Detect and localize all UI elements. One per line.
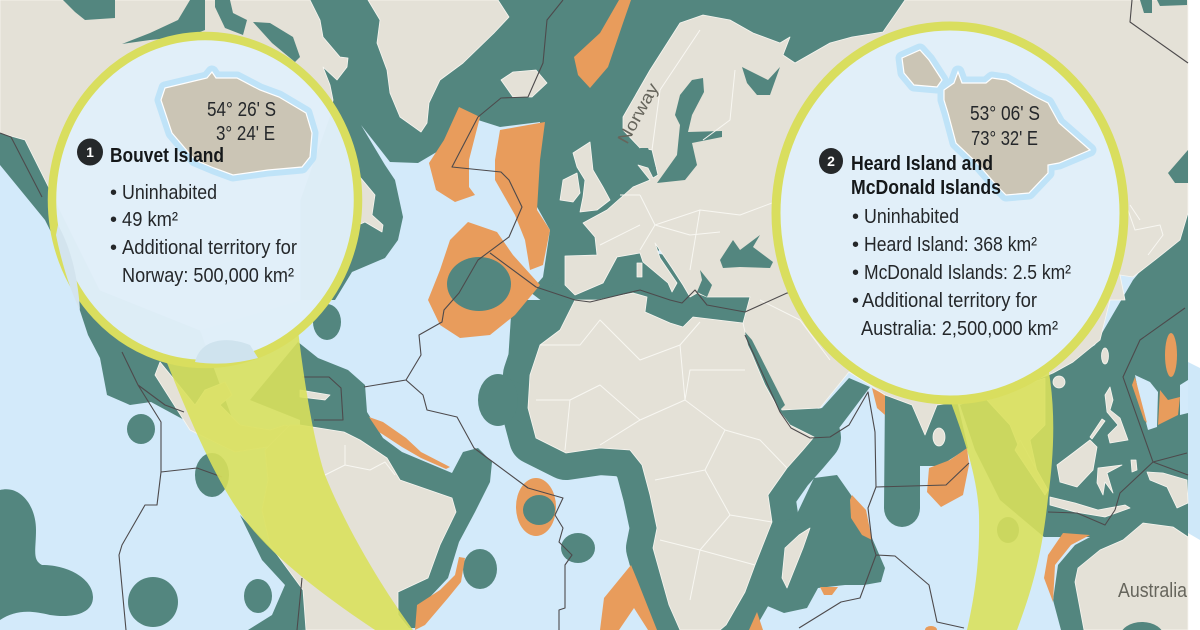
- facts: Heard Island: •: [852, 290, 859, 312]
- zone: Pacific North America: [0, 133, 240, 440]
- zone: India and Maldives: [884, 392, 968, 527]
- land: Philippines: [1105, 387, 1128, 443]
- sea: White Sea: [742, 67, 780, 95]
- zone: Chile coast: [240, 515, 302, 630]
- facts: Bouvet Island: Uninhabited: [122, 182, 217, 204]
- facts: Heard Island: •: [852, 234, 859, 256]
- faint map shape: North America coast: [56, 225, 80, 310]
- faint map shape: Central America: [195, 340, 258, 364]
- facts: Heard Island: Uninhabited: [864, 206, 959, 228]
- land: Eurasia: [565, 0, 1188, 435]
- panel: Bouvet Island circle: [52, 36, 358, 364]
- sea: Sea of Japan area: [1168, 150, 1188, 183]
- callout beam to Bouvet Island: [165, 330, 413, 630]
- facts: Bouvet Island: •: [110, 237, 117, 259]
- land: Central America: [155, 362, 300, 452]
- sea: northeast Arctic: [1140, 0, 1152, 13]
- zone: Brazil offshore island: [463, 549, 497, 589]
- land: Africa: [528, 293, 814, 630]
- heading: Heard Island and McDonald Islands: [851, 153, 1001, 199]
- zone: Foxe Basin: [253, 22, 300, 62]
- orange zone: Brazil: [415, 557, 465, 630]
- zone: Polynesia: [0, 489, 93, 620]
- sea: Baltic: [657, 78, 722, 183]
- borders: Europe: [600, 30, 800, 270]
- land: Britain: [573, 142, 610, 212]
- land: Java and Lesser Sunda: [1050, 497, 1130, 517]
- orange zone: Norwegian Sea: [574, 0, 631, 88]
- label: Norway: Norway: [614, 80, 663, 147]
- badge: number 1: 1: [86, 144, 94, 160]
- land: Sumatra: [1015, 440, 1048, 495]
- boundary: Caribbean: [302, 377, 343, 420]
- islands over orange zones: [447, 257, 555, 525]
- sea: Aegean: [697, 270, 712, 297]
- zone: Pacific islands: [128, 577, 178, 627]
- orange zone: Bay of Bengal: [927, 448, 969, 507]
- boundary: Azores to Mediterranean: [490, 253, 795, 312]
- zone: Ascension region: [561, 533, 595, 563]
- map: McDonald Islands: [902, 50, 942, 87]
- zone: Azores core: [447, 257, 511, 311]
- fishing and shelf zones in orange: [369, 0, 1188, 630]
- heading: Heard Island and McDonald Islands: McDonald Islands: [851, 177, 1001, 199]
- zone: North Atlantic and Arctic: [290, 0, 1000, 315]
- orange zone: St Helena: [516, 478, 556, 536]
- coordinates: Heard: 53° 06' S: [970, 103, 1040, 125]
- national borders in white: [325, 30, 1163, 600]
- sea: Black Sea: [720, 235, 773, 268]
- zone: Galapagos: [195, 453, 229, 497]
- map: Heard Island halo: [944, 72, 1090, 195]
- facts: Bouvet Island: •: [110, 209, 117, 231]
- land: Iceland: [501, 70, 547, 97]
- land: Greenland: [368, 0, 509, 132]
- orange zone: Iceland east: [495, 122, 550, 270]
- land: New Guinea: [1147, 472, 1188, 508]
- land: Sardinia: [637, 263, 642, 277]
- zone: Canadian channel: [215, 0, 247, 35]
- land: Halmahera: [1131, 460, 1137, 472]
- ocean gap: northwest Australia: [1040, 537, 1090, 602]
- zone: Madagascar and Mascarene: [745, 475, 885, 613]
- coordinates: Heard: [970, 103, 1040, 150]
- boundary: Red Sea to Indian Ocean: [745, 335, 969, 628]
- land: Indochina: [985, 378, 1045, 485]
- zone: Cocos under beam: [997, 517, 1019, 543]
- coordinates: Bouvet: [207, 99, 276, 145]
- facts: Heard Island: [852, 206, 1071, 340]
- land: Sulawesi: [1097, 465, 1122, 495]
- orange zone: south of Madagascar: [820, 587, 838, 595]
- orange zone: Namibia: [600, 565, 657, 630]
- orange zone: Azores: [428, 222, 540, 338]
- map: Bouvet Island: [161, 72, 312, 175]
- circle background: [776, 26, 1124, 400]
- orange zone: Mozambique south: [749, 612, 763, 630]
- land: Sri Lanka: [933, 428, 945, 446]
- map: Heard Island: [944, 72, 1090, 195]
- zone: south of Australia: [1120, 622, 1164, 630]
- land: Taiwan: [1102, 348, 1108, 364]
- zone: Caribbean and Guiana coast: [250, 342, 492, 630]
- zone: Clipperton: [127, 414, 155, 444]
- facts: Heard Island: McDonald Islands: 2.5 km²: [864, 262, 1071, 284]
- callout beam to Heard Island: [950, 367, 1053, 630]
- land: Hainan: [1053, 376, 1065, 388]
- orange zone: Micronesia: [1158, 390, 1180, 425]
- boundary: Indonesia and Pacific: [1048, 308, 1188, 525]
- land: Ireland: [560, 173, 580, 202]
- orange zone: northwest Australia: [1044, 533, 1090, 602]
- boundary: Greenland to Azores: [364, 0, 563, 387]
- land: Palawan: [1090, 419, 1105, 439]
- zone: Canary blob: [478, 374, 518, 426]
- land: Borneo: [1057, 440, 1097, 487]
- zone: Bermuda: [313, 304, 341, 340]
- facts: Bouvet Island: Norway: 500,000 km²: [122, 265, 294, 287]
- orange zone: Guiana: [369, 417, 450, 469]
- heading: Heard Island and McDonald Islands: Heard Island and: [851, 153, 993, 175]
- facts: Bouvet Island: 49 km²: [122, 209, 178, 231]
- facts: Heard Island: Australia: 2,500,000 km²: [861, 318, 1058, 340]
- boundary: Mid-Atlantic: [406, 380, 572, 630]
- badge: number 1: [77, 138, 103, 166]
- badge: number 2: 2: [827, 153, 835, 169]
- coordinates: Bouvet: 3° 24' E: [216, 123, 275, 145]
- zone: Mediterranean: [560, 250, 755, 332]
- zone: Arabian Sea: [784, 378, 870, 445]
- land: Nova Scotia: [358, 177, 383, 232]
- borders: South America: [325, 445, 395, 475]
- orange zone: Seychelles: [850, 495, 872, 540]
- land: South America: [262, 425, 456, 630]
- borders: Middle East and Asia: [760, 205, 1163, 360]
- ocean gap: Philippine Sea: [1135, 375, 1158, 430]
- sea: Kattegat: [640, 148, 656, 168]
- sea: Red Sea: [745, 332, 785, 410]
- sea: East Siberian: [1157, 0, 1187, 6]
- facts: Heard Island: Heard Island: 368 km²: [864, 234, 1037, 256]
- facts: Bouvet Island: [110, 182, 297, 287]
- map labels: [614, 80, 1188, 602]
- facts: Heard Island: •: [852, 262, 859, 284]
- zone: Moroccan Atlantic: [507, 300, 560, 400]
- coordinates: Heard: 73° 32' E: [971, 128, 1038, 150]
- orange zone: bottom Indian Ocean: [925, 626, 937, 630]
- coordinates: Bouvet: 54° 26' S: [207, 99, 276, 121]
- map: McDonald Islands halo: [902, 50, 942, 87]
- land: Madagascar: [782, 528, 810, 588]
- heading: Bouvet Island: Bouvet Island: [110, 145, 224, 167]
- land: Australia: [1075, 523, 1188, 630]
- label: Australia: Australia: [1118, 580, 1188, 602]
- orange zone: Philippine Sea oval: [1165, 333, 1177, 377]
- zone: north of Canada: [63, 0, 115, 20]
- facts: Heard Island: Additional territory for: [862, 290, 1037, 312]
- boundary: North American Pacific: [0, 133, 42, 197]
- map: Bouvet Island halo: [161, 72, 312, 175]
- land: North America: [0, 0, 348, 330]
- right margin ocean strip: [1188, 362, 1200, 540]
- circle background: [52, 36, 358, 364]
- borders: Africa: [536, 320, 787, 600]
- boundary: northeast Asia: [1130, 0, 1188, 63]
- zone: Juan Fernandez: [244, 579, 272, 613]
- panel: Heard Island circle: [776, 26, 1124, 400]
- zone: St Helena core: [523, 495, 555, 525]
- zone: Africa coastal buffer: [528, 293, 814, 630]
- ocean gap: Pacific east: [1180, 380, 1188, 415]
- orange zone: Philippine Sea west: [1132, 377, 1147, 423]
- orange zone: Iceland west: [429, 107, 480, 202]
- facts: Heard Island: •: [852, 206, 859, 228]
- zone: Hudson Bay strip: [122, 0, 205, 44]
- boundary: Eastern Pacific: [119, 352, 302, 630]
- facts: Bouvet Island: Additional territory for: [122, 237, 297, 259]
- zone: Southeast Asia and Indonesia: [960, 213, 1188, 630]
- land: Cuba and Antilles: [300, 390, 330, 400]
- facts: Bouvet Island: •: [110, 182, 117, 204]
- orange zone: west of India: [872, 388, 885, 415]
- badge: number 2: [819, 148, 843, 174]
